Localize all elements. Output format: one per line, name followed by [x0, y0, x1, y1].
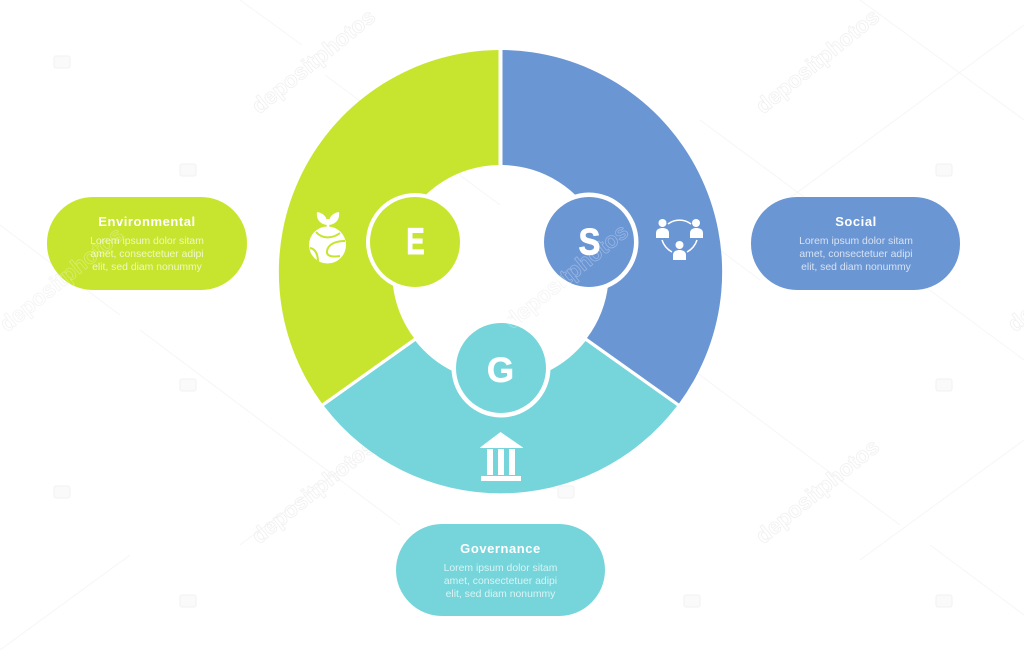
- circle: S: [540, 192, 638, 292]
- watermark overlay on coloured shapes: [0, 219, 633, 337]
- heading: social: Social: [835, 214, 877, 229]
- circle: S: S: [579, 222, 600, 263]
- watermark overlay on coloured shapes: depositphotos: [500, 219, 633, 334]
- segment: environmental: [279, 50, 498, 404]
- text: social description: elit, sed diam nonummy: [801, 262, 912, 273]
- panel: governance: [396, 524, 605, 616]
- text: governance description: amet, consectetuer adipi: [444, 576, 557, 587]
- circle: G: G: [487, 351, 514, 390]
- circle: E: [366, 193, 464, 291]
- panel: environmental: [47, 197, 247, 290]
- segment: social: [502, 50, 722, 404]
- circle: E: E: [406, 221, 425, 262]
- text: environmental description: amet, consectetuer adipi: [90, 249, 204, 260]
- heading: environmental: Environmental: [98, 214, 196, 229]
- text: social description: Lorem ipsum dolor sitam: [799, 236, 913, 247]
- text: environmental description: Lorem ipsum dolor sitam: [90, 236, 204, 247]
- background watermark: depositphotos: [751, 434, 884, 549]
- background watermark: depositphotos: [247, 4, 380, 119]
- donut chart: [279, 50, 722, 493]
- icon: classical bank building: [480, 432, 523, 481]
- text: environmental description: elit, sed diam nonummy: [92, 262, 203, 273]
- text: social description: amet, consectetuer adipi: [799, 249, 913, 260]
- circle: G: [452, 318, 550, 418]
- background watermark: depositphotos: [751, 4, 884, 119]
- panel: social: [751, 197, 960, 290]
- text: governance description: Lorem ipsum dolor sitam: [444, 563, 557, 574]
- background watermark: depositphotos: [500, 219, 633, 334]
- segment: governance: [324, 341, 677, 493]
- icon: people network: [656, 219, 703, 260]
- icon: globe with sprout: [309, 212, 346, 264]
- background watermark: depositphotos: [247, 434, 380, 549]
- heading: governance: Governance: [460, 541, 541, 556]
- text: governance description: elit, sed diam nonummy: [446, 589, 556, 600]
